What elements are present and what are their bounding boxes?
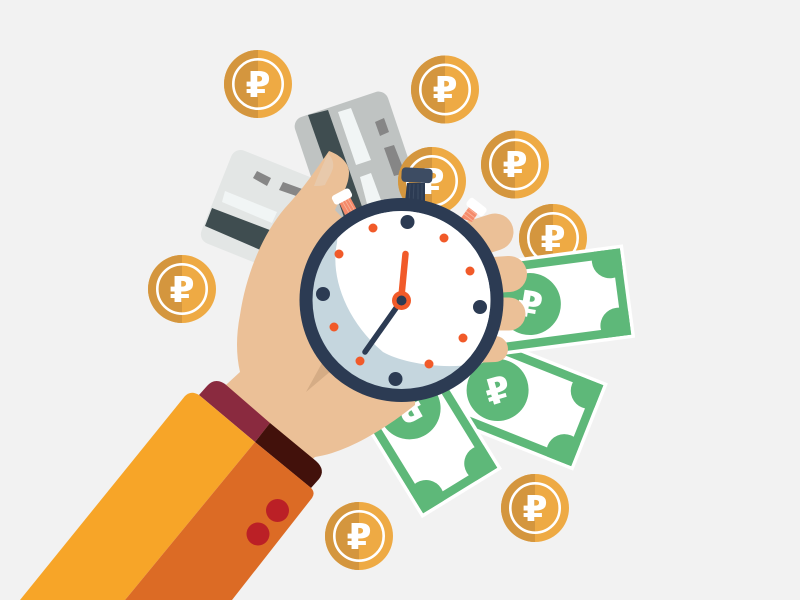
- hour markers: [316, 215, 487, 386]
- coin: upper right: ₽: [502, 136, 528, 188]
- coin: top centre: [411, 56, 479, 124]
- dial: [312, 211, 490, 389]
- right pusher: [461, 197, 488, 222]
- stopwatch: [300, 167, 520, 402]
- coin: bottom centre: [325, 502, 393, 570]
- credit card: grey: [292, 89, 433, 262]
- bezel: [300, 198, 504, 402]
- coin: bottom right: ₽: [522, 480, 548, 532]
- credit card: light: [198, 147, 374, 296]
- coin: left: [148, 255, 216, 323]
- banknote: bottom: [371, 390, 502, 518]
- coin: right: [519, 204, 587, 272]
- banknote: middle: [452, 352, 608, 470]
- coin: bottom right: [501, 474, 569, 542]
- banknote: top: [497, 244, 635, 355]
- coin: left: ₽: [169, 261, 195, 313]
- clock hands: [365, 254, 411, 352]
- coin: upper right: [481, 130, 549, 198]
- banknote: bottom: ₽: [387, 381, 434, 439]
- hand: [215, 151, 509, 470]
- coin: behind stopwatch: [398, 147, 466, 215]
- sleeve buttons: [246, 499, 289, 546]
- coin: right: ₽: [540, 210, 566, 262]
- banknote: middle: ₽: [478, 360, 516, 417]
- coin: bottom centre: ₽: [346, 508, 372, 560]
- coin: behind stopwatch: ₽: [419, 153, 445, 205]
- jacket sleeve: [20, 393, 314, 600]
- minute markers: [330, 224, 474, 368]
- left pusher: [331, 187, 357, 215]
- banknote: top: ₽: [514, 274, 547, 330]
- coin: top centre: ₽: [432, 61, 458, 113]
- coin: top left: ₽: [245, 56, 271, 108]
- shirt cuff: [199, 381, 322, 488]
- crown: [401, 167, 433, 204]
- coin: top left: [224, 50, 292, 118]
